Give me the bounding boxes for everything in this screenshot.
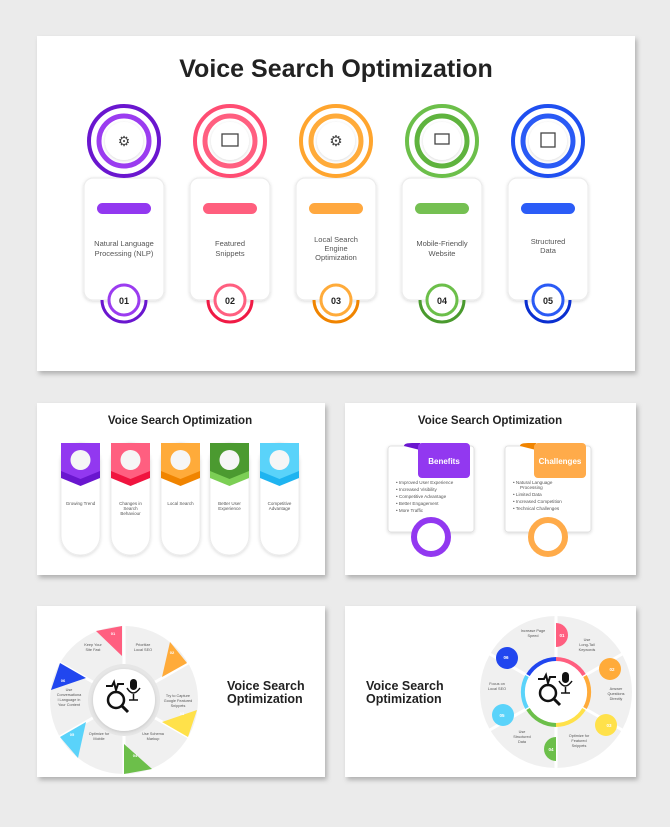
wheel diagram: Use: [519, 730, 525, 734]
card: benefits: • Better Engagement: [396, 501, 439, 506]
column: Competitive Advantage: Advantage: [269, 506, 291, 511]
column 5: 05: [543, 296, 553, 306]
wheel diagram: Mobile: [93, 737, 105, 741]
panel: wheel slide right: [345, 606, 636, 777]
wheel diagram: 04: [133, 753, 138, 758]
wheel diagram: Answer: [610, 687, 623, 691]
wheel diagram: 02: [170, 650, 175, 655]
panel: wheel slide left: [37, 606, 325, 777]
wheel diagram: Increase Page: [521, 629, 545, 633]
wheel diagram: Google Featured: [164, 699, 192, 703]
column 3: Engine: [324, 244, 348, 253]
card: benefits: • More Traffic: [396, 508, 424, 513]
wheel diagram: Optimize for: [89, 732, 110, 736]
wheel diagram: Use: [66, 688, 72, 692]
column: Better User Experience: [210, 443, 249, 555]
wheel diagram: Directly: [610, 697, 622, 701]
wheel diagram: 02: [609, 667, 615, 672]
column 3: Local Search: [314, 235, 358, 244]
wheel diagram: 05: [70, 732, 75, 737]
heading: [366, 679, 444, 706]
column 4: Mobile-Friendly: [416, 239, 468, 248]
column: Changes in Search Behaviour: Changes in: [119, 501, 142, 506]
column 4: 04: [437, 296, 447, 306]
wheel diagram: Use: [584, 638, 590, 642]
title: Voice Search Optimization: [179, 55, 493, 83]
card: benefits: • Improved User Experience: [396, 480, 454, 485]
wheel diagram: 03: [606, 723, 612, 728]
column 2: Snippets: [215, 249, 245, 258]
column 2: 02: [225, 296, 235, 306]
wheel diagram: Focus on: [489, 682, 505, 686]
column 3: Optimization: [315, 253, 357, 262]
wheel diagram: l Language in: [58, 698, 80, 702]
card: challenges: • Technical Challenges: [513, 506, 560, 511]
wheel diagram: Your Content: [58, 703, 81, 707]
heading: Optimization: [227, 692, 303, 706]
column: Competitive Advantage: [260, 443, 299, 555]
column 4: Website: [429, 249, 455, 258]
wheel diagram: Prioritize: [136, 643, 150, 647]
card: challenges: • Increased Competition: [513, 499, 562, 504]
card: benefits: • Competitive Advantage: [396, 494, 447, 499]
wheel diagram: 04: [548, 747, 554, 752]
column: Better User Experience: Better User: [218, 501, 241, 506]
wheel diagram: Conversationa: [57, 693, 82, 697]
column 4: [402, 106, 482, 322]
wheel diagram: Local SEO: [134, 648, 152, 652]
panel: main slide: [37, 36, 635, 371]
column: Growing Trend: Growing Trend: [66, 501, 96, 506]
wheel diagram: Try to Capture: [166, 694, 190, 698]
column 1: Processing (NLP): [95, 249, 154, 258]
wheel diagram: [50, 624, 198, 776]
icon: voice search: [106, 679, 140, 712]
column: Local Search: [161, 443, 200, 555]
wheel diagram: Snippets: [572, 744, 586, 748]
wheel diagram: Data: [518, 740, 527, 744]
card: challenges: [505, 443, 591, 554]
column 2: [190, 106, 270, 322]
wheel diagram: Long-Tail: [579, 643, 595, 647]
column 1: Natural Language: [94, 239, 154, 248]
wheel diagram: 03: [180, 711, 185, 716]
column: Changes in Search Behaviour: Search: [123, 506, 138, 511]
wheel diagram: Structured: [513, 735, 531, 739]
column 3: ⚙: [329, 133, 343, 150]
heading: Voice Search: [366, 679, 444, 693]
column: Changes in Search Behaviour: Behaviour: [120, 511, 141, 516]
column 5: [508, 106, 588, 322]
wheel diagram: Optimize for: [569, 734, 590, 738]
wheel diagram: Featured: [571, 739, 587, 743]
column 5: Data: [540, 246, 557, 255]
card: benefits: Benefits: [428, 457, 460, 466]
card: challenges: • Natural Language: [513, 480, 553, 485]
column 1: [84, 106, 164, 322]
panel: reasons slide: [37, 403, 325, 575]
heading: Voice Search Optimization: [418, 415, 562, 427]
heading: [227, 679, 305, 706]
card: challenges: • Limited Data: [513, 492, 542, 497]
wheel diagram: 06: [503, 655, 509, 660]
column 1: 01: [119, 296, 129, 306]
wheel diagram: Keywords: [579, 648, 595, 652]
column: Changes in Search Behaviour: [111, 443, 150, 555]
icon: voice search: [538, 672, 572, 705]
card: challenges: Processing: [520, 485, 543, 490]
wheel diagram: [480, 614, 632, 770]
wheel diagram: 06: [61, 678, 66, 683]
wheel diagram: Keep Your: [84, 643, 102, 647]
wheel diagram: Site Fast: [86, 648, 101, 652]
card: benefits: • Increased Visibility: [396, 487, 438, 492]
card: benefits: [388, 443, 474, 554]
column: Local Search: Local Search: [167, 501, 194, 506]
wheel diagram: Use Schema: [142, 732, 165, 736]
column 2: Featured: [215, 239, 245, 248]
column: Better User Experience: Experience: [218, 506, 241, 511]
heading: Optimization: [366, 692, 442, 706]
wheel diagram: 01: [559, 633, 565, 638]
column: Growing Trend: [61, 443, 100, 555]
wheel diagram: Snippets: [171, 704, 185, 708]
wheel diagram: 01: [111, 631, 116, 636]
column 3: [296, 106, 376, 322]
card: challenges: Challenges: [539, 457, 582, 466]
column 5: Structured: [531, 237, 565, 246]
wheel diagram: Local SEO: [488, 687, 506, 691]
wheel diagram: 05: [499, 713, 505, 718]
column 3: 03: [331, 296, 341, 306]
column: Competitive Advantage: Competitive: [268, 501, 292, 506]
wheel diagram: Questions: [607, 692, 625, 696]
wheel diagram: Speed: [528, 634, 538, 638]
panel: benefits and challenges slide: [345, 403, 636, 575]
wheel diagram: Markup: [147, 737, 159, 741]
column 1: ⚙: [118, 133, 130, 149]
heading: Voice Search: [227, 679, 305, 693]
heading: Voice Search Optimization: [108, 415, 252, 427]
